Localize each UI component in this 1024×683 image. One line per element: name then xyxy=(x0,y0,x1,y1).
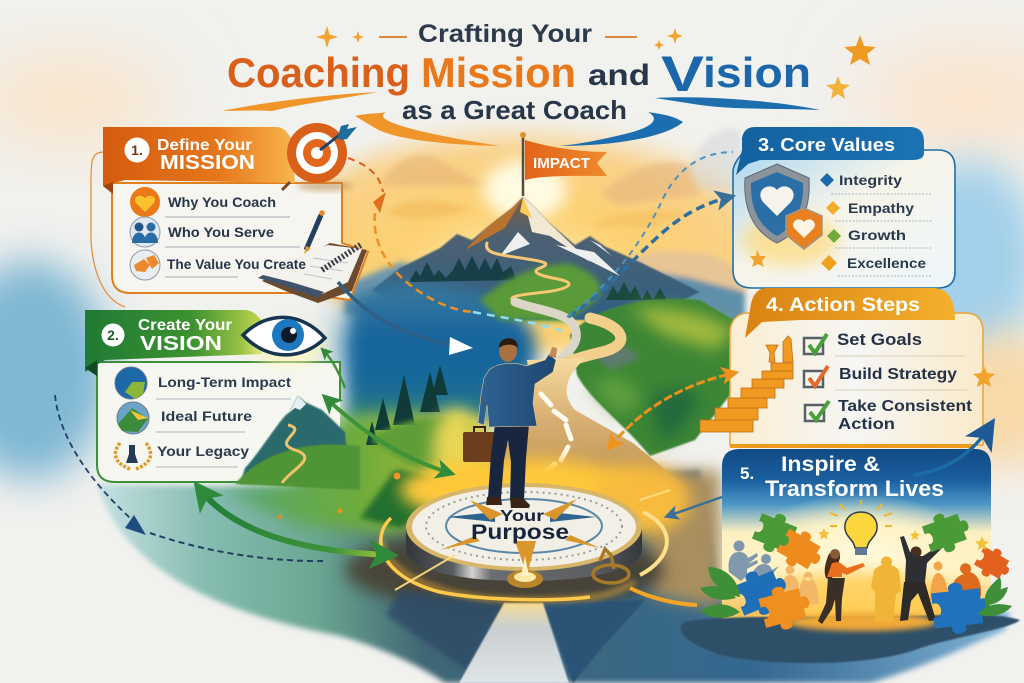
mini landscape xyxy=(235,396,360,490)
scene: sunset sky xyxy=(295,117,765,353)
checklist: Action xyxy=(838,416,895,433)
item: long-term impact xyxy=(115,367,292,399)
stair steps xyxy=(700,336,793,432)
header: VISION xyxy=(140,333,222,355)
heading: 5. xyxy=(740,464,754,483)
panel 5: inspire and transform lives xyxy=(681,449,1020,663)
header: Create Your xyxy=(138,317,232,334)
heading: Transform Lives xyxy=(765,476,944,501)
header: 2. xyxy=(107,327,119,343)
scene: road dashes xyxy=(539,394,571,477)
arrow: navy dashed xyxy=(55,395,130,518)
summit flag: impact xyxy=(520,132,607,196)
arrow: orange two-way to action steps xyxy=(610,373,734,447)
panel 4: action steps xyxy=(700,288,995,448)
values list xyxy=(820,172,932,276)
shoes xyxy=(486,497,530,508)
item: your legacy xyxy=(115,443,250,469)
small stars xyxy=(818,528,989,550)
values list: Empathy xyxy=(848,200,914,216)
glow rays at compass xyxy=(395,490,670,590)
briefcase xyxy=(463,427,495,462)
header: 4. Action Steps xyxy=(766,295,920,316)
compass ring xyxy=(593,549,629,583)
arrow: green two-way to figure xyxy=(326,398,450,473)
panel 1: define your mission xyxy=(91,123,368,307)
icon: light bulb xyxy=(830,500,892,555)
title: ision xyxy=(703,49,811,96)
puzzle pieces xyxy=(730,506,1016,636)
title: V xyxy=(661,46,705,102)
icon: eye xyxy=(243,317,325,365)
jacket xyxy=(478,354,556,427)
compass: your purpose xyxy=(406,483,642,588)
item: long-term impact: Long-Term Impact xyxy=(158,375,292,390)
ground ellipse xyxy=(681,615,1020,663)
figure: coach from behind xyxy=(463,338,557,508)
scene: sun glow at summit xyxy=(483,160,567,220)
bottom paint wash xyxy=(97,470,1010,683)
bulb glow xyxy=(735,494,985,626)
outer outline xyxy=(91,152,125,307)
header xyxy=(745,288,955,338)
values list: Excellence xyxy=(847,255,926,271)
item: who you serve xyxy=(130,217,274,247)
item dividers xyxy=(165,217,300,277)
title: Coaching xyxy=(227,49,410,96)
compass label xyxy=(471,508,569,544)
panel 2: create your vision xyxy=(85,310,360,490)
scene: right green hill xyxy=(570,299,742,456)
arrow: dark to blue swoosh from notebook xyxy=(338,282,458,346)
arrow: orange dashed descending xyxy=(375,213,473,312)
body xyxy=(112,183,368,300)
icon: value handshake xyxy=(130,250,160,280)
header: 1. xyxy=(131,142,143,158)
person: man arms raised xyxy=(900,536,942,621)
panel 3: core values xyxy=(733,127,955,288)
title xyxy=(227,20,811,125)
arrow: orange head up xyxy=(373,192,386,213)
item: your legacy: Your Legacy xyxy=(157,444,250,459)
arrow: green up to eye xyxy=(323,350,345,388)
arrow: blue dashed from core values header xyxy=(567,152,733,317)
item: who you serve: Who You Serve xyxy=(168,224,274,240)
item: why you coach xyxy=(130,187,276,217)
body xyxy=(97,362,340,482)
title: as a Great Coach xyxy=(402,95,627,125)
arrow: blue to purpose from inspire xyxy=(668,497,722,516)
title: Crafting Your xyxy=(418,20,592,48)
item dividers xyxy=(156,399,291,467)
body xyxy=(730,313,983,445)
item: ideal future: Ideal Future xyxy=(161,409,253,424)
arrow: navy dashed tail xyxy=(150,533,325,561)
scene: stone ground glow xyxy=(345,458,690,683)
values list: Growth xyxy=(848,227,906,243)
background team silhouettes xyxy=(729,540,981,622)
scene: forest ridge xyxy=(410,256,516,282)
arrow: blue swoosh up to action steps xyxy=(914,426,990,475)
header xyxy=(736,127,924,175)
checklist xyxy=(804,331,973,433)
body outline xyxy=(97,362,340,482)
scene: clouds xyxy=(380,129,745,228)
arrow: green two-way to compass xyxy=(199,488,390,555)
arrow: orange dashed from target xyxy=(348,158,383,192)
icon: target with arrow xyxy=(282,123,357,191)
title: and xyxy=(588,59,650,92)
scene: far trees right xyxy=(606,282,667,300)
values list: Integrity xyxy=(839,172,902,188)
scene: central green hill xyxy=(480,264,600,322)
heading xyxy=(740,453,944,501)
scene: blue foothills and valley xyxy=(345,285,536,425)
icon: shields xyxy=(742,164,838,267)
head xyxy=(499,338,557,362)
legs xyxy=(488,424,529,500)
title: Mission xyxy=(421,49,576,96)
header: MISSION xyxy=(160,152,255,174)
scene: distant hazy ridges xyxy=(345,250,745,340)
heading: Inspire & xyxy=(781,453,880,476)
low glow xyxy=(760,572,960,628)
scene: glowing ring xyxy=(380,512,697,605)
leaves xyxy=(700,567,1012,618)
compass label: Your xyxy=(500,508,544,525)
scene: main mountain xyxy=(372,197,700,320)
item: why you coach: Why You Coach xyxy=(168,194,276,210)
header: Define Your xyxy=(157,137,252,154)
arrow: white head xyxy=(449,337,473,355)
scene: winding road upper xyxy=(487,243,621,368)
bottom bar xyxy=(730,444,975,448)
checklist: Set Goals xyxy=(837,331,922,349)
arrow: blue dashes to road xyxy=(473,312,562,331)
checklist: Build Strategy xyxy=(839,366,957,383)
person: woman xyxy=(818,549,865,624)
checklist: Take Consistent xyxy=(838,398,973,415)
header xyxy=(85,310,265,376)
icon: notebook with pencil xyxy=(258,210,367,303)
scene: winding road lower xyxy=(420,358,690,490)
compass label: Purpose xyxy=(471,521,569,544)
item: ideal future xyxy=(117,402,253,434)
scene: soft blue haze beside valley xyxy=(340,300,480,390)
body xyxy=(722,449,991,622)
icon: star xyxy=(973,366,995,387)
body xyxy=(733,150,955,288)
item: the value you create: The Value You Create xyxy=(167,256,306,272)
header: 3. Core Values xyxy=(758,135,895,155)
summit flag: impact: IMPACT xyxy=(533,155,590,172)
title flourishes xyxy=(222,26,876,146)
arrow: blue dashed to core values xyxy=(568,197,730,317)
compass flame cup xyxy=(507,556,543,588)
ground glow xyxy=(787,613,937,631)
arrow: navy head xyxy=(125,515,146,535)
header xyxy=(103,127,295,194)
scene: grass field left of figure xyxy=(225,365,490,535)
